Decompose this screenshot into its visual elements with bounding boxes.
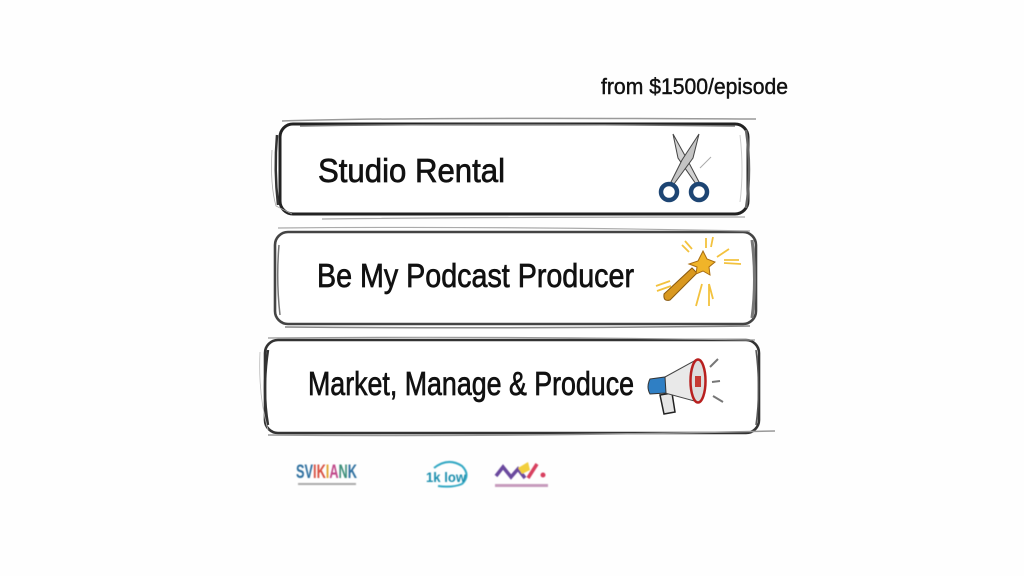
logo: 1k low: 1k low [426,469,466,485]
text: be my podcast producer: Be My Podcast Producer [317,257,634,294]
text: market manage produce: Market, Manage & Produce [308,365,634,402]
logo: purple and pink mark [495,462,548,487]
logo: svikiank: SVIKIANK [296,462,357,483]
panel: market manage produce [260,337,775,436]
panel: studio rental [272,118,756,219]
price label: from $1500/episode [601,74,788,99]
icon: magic wand [656,237,741,306]
icon: megaphone [648,359,723,414]
panel: be my podcast producer [275,227,756,328]
logo: 1k low [426,462,466,487]
icon: scissors [661,134,711,200]
text: studio rental: Studio Rental [318,152,505,189]
